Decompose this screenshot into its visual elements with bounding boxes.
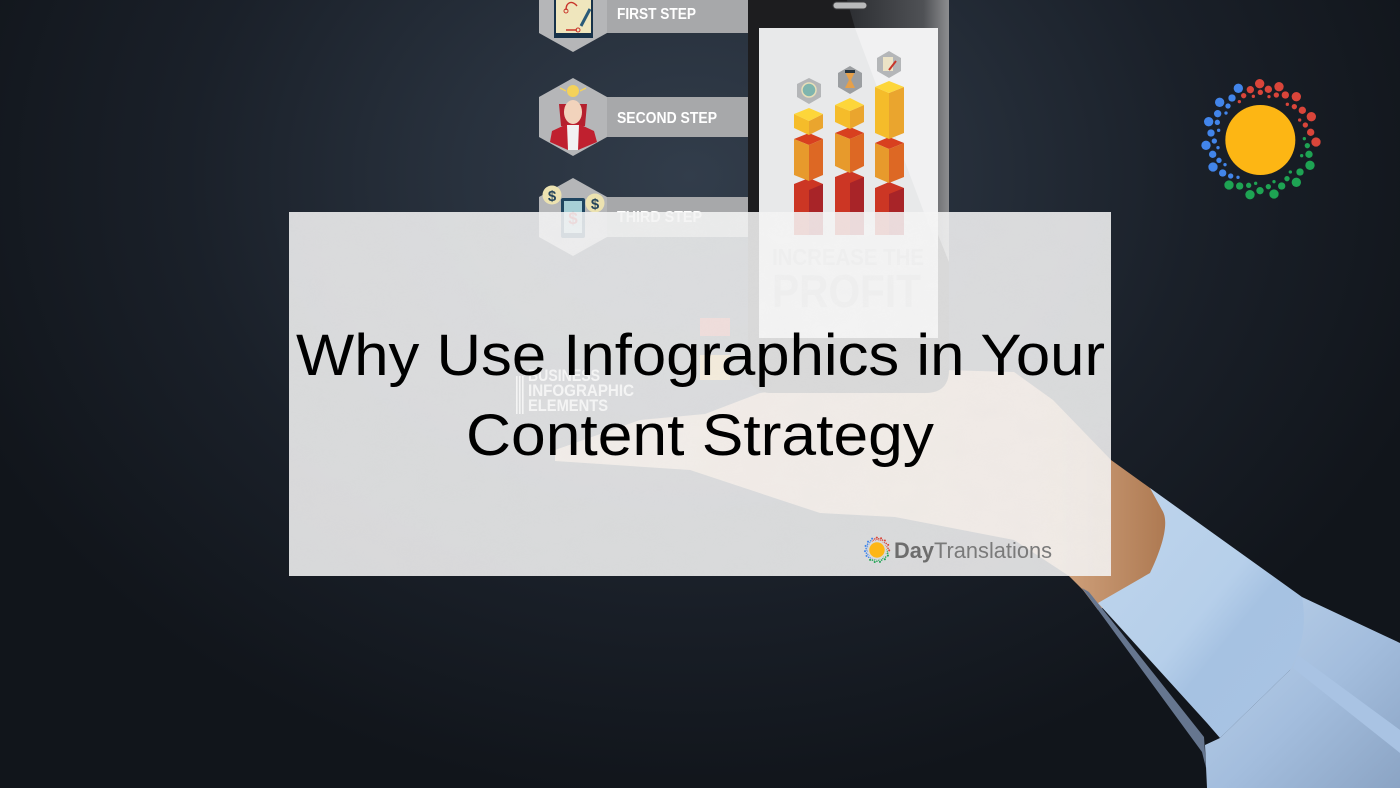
cuff [1098,488,1304,738]
bar chart [794,81,904,235]
icon: strategy map [554,0,593,38]
business infographic elements caption: ELEMENTS [528,397,608,415]
increase the profit caption: PROFIT [772,265,921,317]
shirt lining stripe [1082,588,1206,768]
red business cube [700,318,730,380]
hand [555,370,1180,610]
title: Content Strategy [466,403,934,468]
chart icon: hourglass [838,66,862,94]
brand wordmark: DayTranslations [894,538,1052,563]
phone glare [847,0,949,262]
step 1 banner [600,0,748,33]
bar 2 [835,98,864,235]
sleeve placket [1293,655,1400,753]
step 3 hexagon [539,178,607,256]
sleeve [1205,597,1400,788]
chart icon: document [877,51,901,78]
step 3 label: THIRD STEP [617,209,702,226]
illustration: hand holding phone [516,0,1400,788]
step 3 banner [600,197,748,237]
icon: woman with idea [550,85,597,150]
business infographic elements caption: BUSINESS [528,367,600,385]
step 3 [539,178,748,256]
icon: phone with dollars: $ [591,196,600,213]
bar 3 [875,81,904,235]
chart icon: globe [797,78,821,104]
increase the profit caption: INCREASE THE [772,244,924,270]
phone speaker [833,2,867,9]
step 2 banner [600,97,748,137]
icon: phone with dollars: $ [548,188,557,205]
step 1 [539,0,748,52]
phone body [748,0,949,393]
icon: phone with dollars [542,186,604,238]
step 2 [539,78,748,156]
phone screen [759,28,938,338]
step 2 label: SECOND STEP [617,110,717,127]
icon: phone with dollars: $ [568,209,578,228]
step 1 hexagon [539,0,607,52]
step 2 hexagon [539,78,607,156]
step 1 label: FIRST STEP [617,6,696,23]
business infographic elements caption: INFOGRAPHIC [528,382,634,400]
brand sun icon [864,537,890,563]
business infographic elements caption [516,367,634,415]
screen glare [855,28,938,250]
title: Why Use Infographics in Your [296,323,1105,388]
increase the profit caption [772,244,924,317]
brand logo: Day Translations [864,537,1052,563]
title [296,323,1105,468]
panel: translucent paper card [289,212,1111,576]
logo: sun with colored dots [1201,79,1321,199]
bar 1 [794,108,823,235]
phone [748,0,949,393]
